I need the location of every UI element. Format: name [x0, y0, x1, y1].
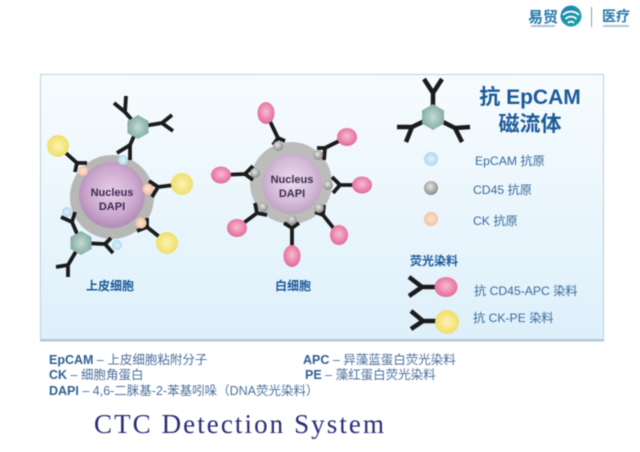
antibodies, beads and dyes on epithelial cell [47, 96, 193, 277]
white blood cell label: 白细胞 [275, 278, 311, 293]
legend title: 抗 EpCAM [479, 85, 581, 109]
white blood cell nucleus label: Nucleus [271, 174, 313, 186]
abbreviation: APC: APC – 异藻蓝蛋白荧光染料 [303, 352, 456, 367]
caption: CTC Detection System: CTC Detection System [94, 409, 384, 439]
epithelial nucleus label: Nucleus [91, 187, 133, 199]
legend: anti-CK-PE dye: 抗 CK-PE 染料 [473, 310, 554, 325]
panel: CTC detection diagram [40, 74, 604, 342]
logo: company brand: 医疗 [602, 8, 630, 24]
legend: CK antigen: CK 抗原 [473, 213, 518, 228]
abbreviations key [49, 352, 456, 398]
legend: EpCAM antigen [424, 152, 545, 168]
epithelial nucleus label: DAPI [99, 201, 125, 213]
legend: anti-EpCAM ferrofluid bead [397, 79, 470, 142]
legend: CD45 antigen [424, 181, 532, 197]
legend: CK antigen [424, 212, 518, 228]
fluorescent dye heading: 荧光染料 [410, 253, 458, 268]
legend: EpCAM antigen: EpCAM 抗原 [475, 153, 545, 168]
abbreviation: PE: PE – 藻红蛋白荧光染料 [305, 367, 436, 382]
abbreviation: CK: CK – 细胞角蛋白 [49, 367, 143, 382]
legend title: 磁流体 [498, 113, 562, 136]
legend: anti-CK-PE dye [411, 310, 554, 334]
epithelial cell label: 上皮细胞 [86, 278, 134, 293]
legend: CD45 antigen: CD45 抗原 [473, 182, 532, 197]
white blood cell diagram [211, 102, 372, 267]
legend: anti-CD45-APC dye [409, 277, 578, 298]
abbreviation: DAPI: DAPI – 4,6-二脒基-2-苯基吲哚（DNA荧光染料） [49, 383, 318, 398]
white blood cell nucleus label: DAPI [279, 188, 305, 200]
epithelial cell diagram [47, 96, 193, 277]
legend: anti-CD45-APC dye: 抗 CD45-APC 染料 [474, 283, 578, 298]
antibodies and dyes on white blood cell [211, 102, 372, 267]
logo: company brand [528, 6, 630, 27]
logo: company brand: 易贸 [528, 9, 558, 26]
abbreviation: EpCAM: EpCAM – 上皮细胞粘附分子 [49, 352, 207, 367]
